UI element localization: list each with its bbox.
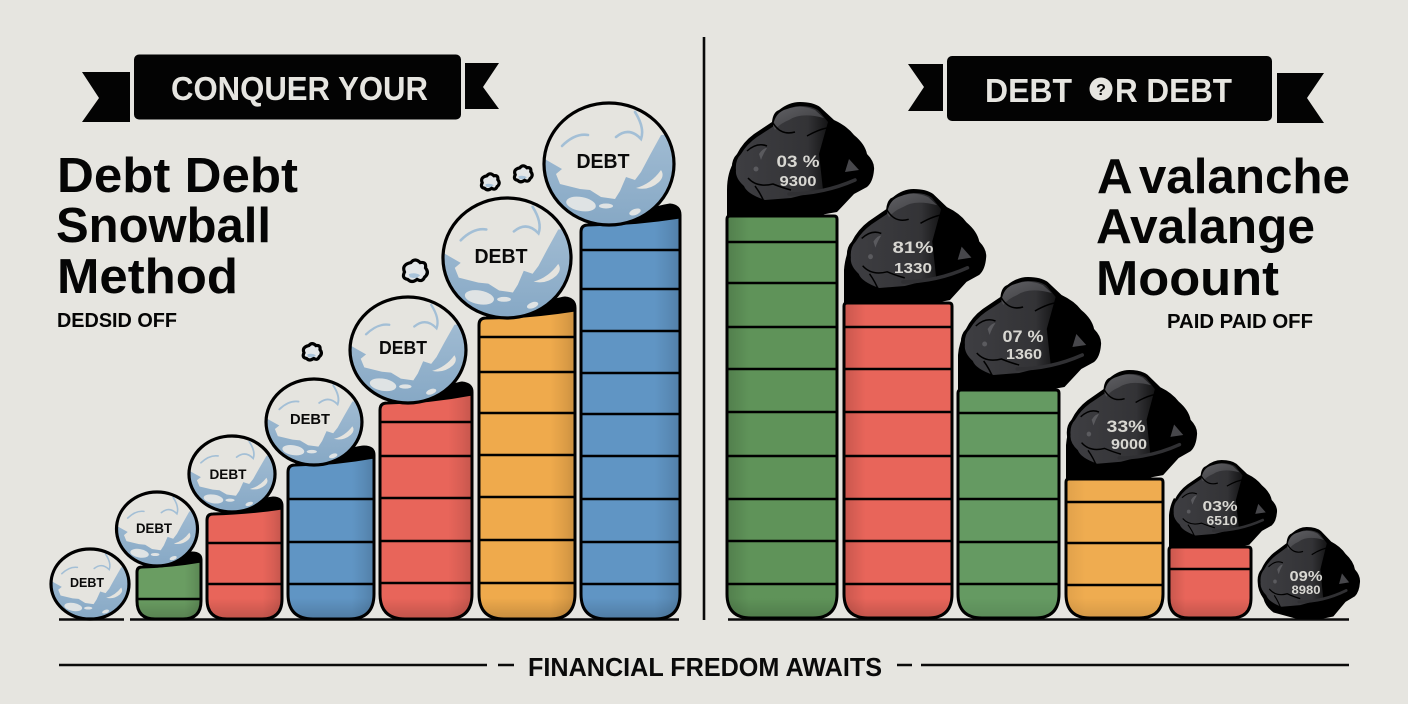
- right title: Moount: [1096, 252, 1279, 306]
- snowball step 5: red bar: [346, 297, 472, 619]
- snowball 1: [48, 549, 132, 624]
- avalanche step 3: green bar with boulder: [958, 277, 1101, 618]
- avalanche step 1: green bar with boulder: [727, 102, 874, 618]
- left title: Snowball: [56, 199, 271, 253]
- avalanche step 2: red bar with boulder: 81%: [892, 238, 934, 257]
- right banner: [908, 56, 1324, 123]
- footer right rule: [897, 664, 1349, 666]
- avalanche step 4: orange bar with boulder: 33%: [1106, 417, 1146, 436]
- snowball step 7: blue bar: DEBT: [576, 151, 630, 173]
- puff: [303, 344, 321, 360]
- left title: [56, 149, 298, 304]
- avalanche step 4: orange bar with boulder: 9000: [1111, 436, 1147, 453]
- right subtitle: PAID PAID OFF: [1167, 311, 1313, 333]
- left title: Debt Debt: [57, 149, 298, 203]
- right title: [1096, 150, 1350, 306]
- right ribbon tail: [1277, 73, 1324, 123]
- snowball step 3: red bar: DEBT: [210, 466, 247, 482]
- ground line: [728, 618, 1349, 621]
- left title: Method: [57, 250, 238, 304]
- puff: [403, 260, 427, 282]
- avalanche step 5: red bar with boulder: 03%: [1202, 498, 1238, 515]
- snowball step 2: green bar: DEBT: [136, 520, 172, 536]
- snowball 1: DEBT: [70, 575, 104, 590]
- left ribbon tail: [82, 72, 130, 122]
- snowball step 7: blue bar: [539, 103, 680, 619]
- left banner: [82, 54, 499, 122]
- banner text continued: R DEBT: [1115, 72, 1232, 109]
- avalanche step 6: boulder on ground: 8980: [1292, 583, 1321, 597]
- right title: Avalanche: [1097, 150, 1350, 204]
- puff: [481, 174, 499, 190]
- question mark circle: [1090, 78, 1112, 100]
- banner text: DEBT: [985, 72, 1072, 109]
- snowball step 5: red bar: DEBT: [379, 338, 427, 358]
- center divider: [703, 37, 705, 620]
- banner text: CONQUER YOUR: [171, 70, 428, 107]
- ground line: [59, 618, 679, 621]
- snowball step 4: blue bar: DEBT: [290, 411, 330, 428]
- snowball step 6: orange bar: [438, 198, 576, 619]
- avalanche step 5: red bar with boulder: [1169, 460, 1277, 618]
- avalanche step 1: green bar with boulder: 9300: [780, 173, 816, 190]
- footer left rule: [59, 664, 514, 666]
- avalanche step 2: red bar with boulder: [844, 189, 986, 618]
- puff: [514, 166, 532, 182]
- snowball step 6: orange bar: DEBT: [474, 246, 528, 268]
- snowball chart: [48, 103, 680, 624]
- left ribbon tail: [908, 64, 943, 111]
- avalanche step 6: boulder on ground: 09%: [1290, 568, 1322, 585]
- snowball step 3: red bar: [186, 436, 282, 619]
- avalanche step 6: boulder on ground: [1258, 527, 1360, 619]
- banner plate: [947, 56, 1272, 121]
- avalanche step 2: red bar with boulder: 1330: [894, 260, 932, 277]
- avalanche step 3: green bar with boulder: 07 %: [1002, 327, 1044, 346]
- avalanche step 4: orange bar with boulder: [1066, 370, 1197, 618]
- snowball step 4: blue bar: [262, 379, 374, 619]
- left subtitle: DEDSID OFF: [57, 310, 177, 332]
- snowball step 2: green bar: [113, 492, 201, 619]
- avalanche step 3: green bar with boulder: 1360: [1006, 346, 1042, 363]
- footer text: FINANCIAL FREDOM AWAITS: [528, 652, 882, 682]
- right ribbon tail: [465, 63, 499, 109]
- avalanche chart: [727, 102, 1360, 620]
- question mark circle: ?: [1096, 82, 1106, 99]
- avalanche step 5: red bar with boulder: 6510: [1206, 513, 1238, 528]
- right title: Avalange: [1096, 200, 1315, 254]
- banner plate: [134, 54, 461, 120]
- avalanche step 1: green bar with boulder: 03 %: [776, 152, 820, 171]
